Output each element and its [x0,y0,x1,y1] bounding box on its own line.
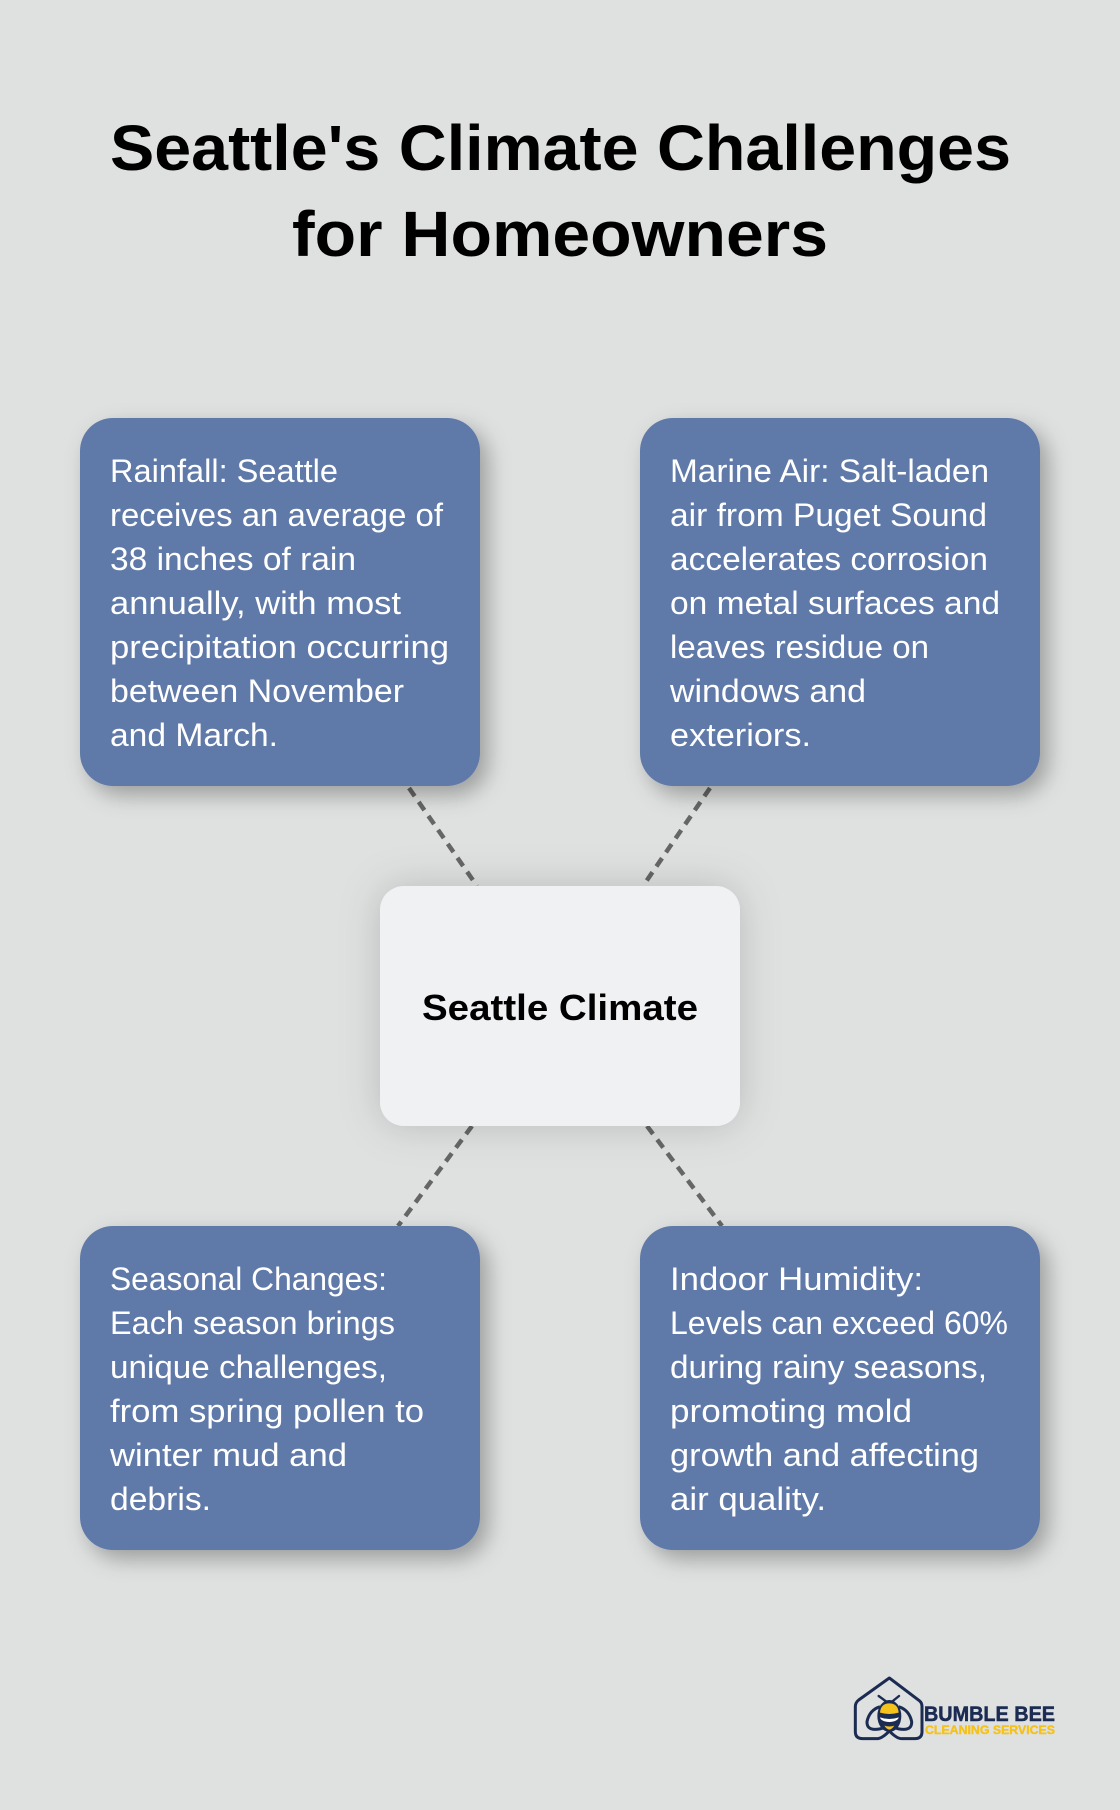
title: Seattle's Climate Challenges [110,112,1011,184]
title: for Homeowners [292,198,828,270]
panel: marine air: exteriors. [670,717,811,753]
panel: rainfall: Rainfall: Seattle [110,453,338,489]
panel: center seattle climate [380,886,740,1126]
panel: indoor humidity: Indoor Humidity: [670,1261,923,1297]
icon: house with bee [855,1678,922,1739]
logo wordmark: BUMBLE BEE [924,1703,1055,1726]
panel: marine air: accelerates corrosion [670,541,988,577]
panel: seasonal changes: from spring pollen to [110,1393,424,1429]
title [110,112,1011,270]
panel: marine air [640,418,1040,786]
panel: indoor humidity: during rainy seasons, [670,1349,987,1385]
connector: rainfall to center [409,788,477,886]
panel: seasonal changes: Seasonal Changes: [110,1261,387,1297]
panel: marine air: Marine Air: Salt-laden [670,453,989,489]
panel: rainfall: precipitation occurring [110,629,449,665]
panel: marine air: on metal surfaces and [670,585,1000,621]
logo: bumble bee cleaning services [855,1678,1055,1739]
panel: indoor humidity: promoting mold [670,1393,912,1429]
panel: marine air: windows and [669,673,866,709]
logo tagline: CLEANING SERVICES [925,1725,1055,1737]
panel: indoor humidity: air quality. [670,1481,826,1517]
panel: marine air: leaves residue on [670,629,929,665]
panel: indoor humidity: Levels can exceed 60% [670,1305,1008,1341]
panel: indoor humidity: growth and affecting [670,1437,979,1473]
panel: seasonal changes [80,1226,480,1550]
panel: rainfall [80,418,480,786]
panel: rainfall: 38 inches of rain [110,541,356,577]
panel: seasonal changes: unique challenges, [110,1349,387,1385]
panel: rainfall: between November [110,673,404,709]
center label: Seattle Climate [422,987,698,1028]
connector: marine air to center [643,788,710,886]
panel: marine air: air from Puget Sound [670,497,987,533]
panel: seasonal changes: Each season brings [110,1305,395,1341]
panel: seasonal changes: winter mud and [109,1437,347,1473]
panel: indoor humidity [640,1226,1040,1550]
panel: rainfall: receives an average of [110,497,443,533]
connector: center to seasonal changes [398,1126,472,1226]
panel: rainfall: annually, with most [110,585,401,621]
connector: center to indoor humidity [647,1126,722,1226]
panel: seasonal changes: debris. [110,1481,211,1517]
panel: rainfall: and March. [110,717,278,753]
